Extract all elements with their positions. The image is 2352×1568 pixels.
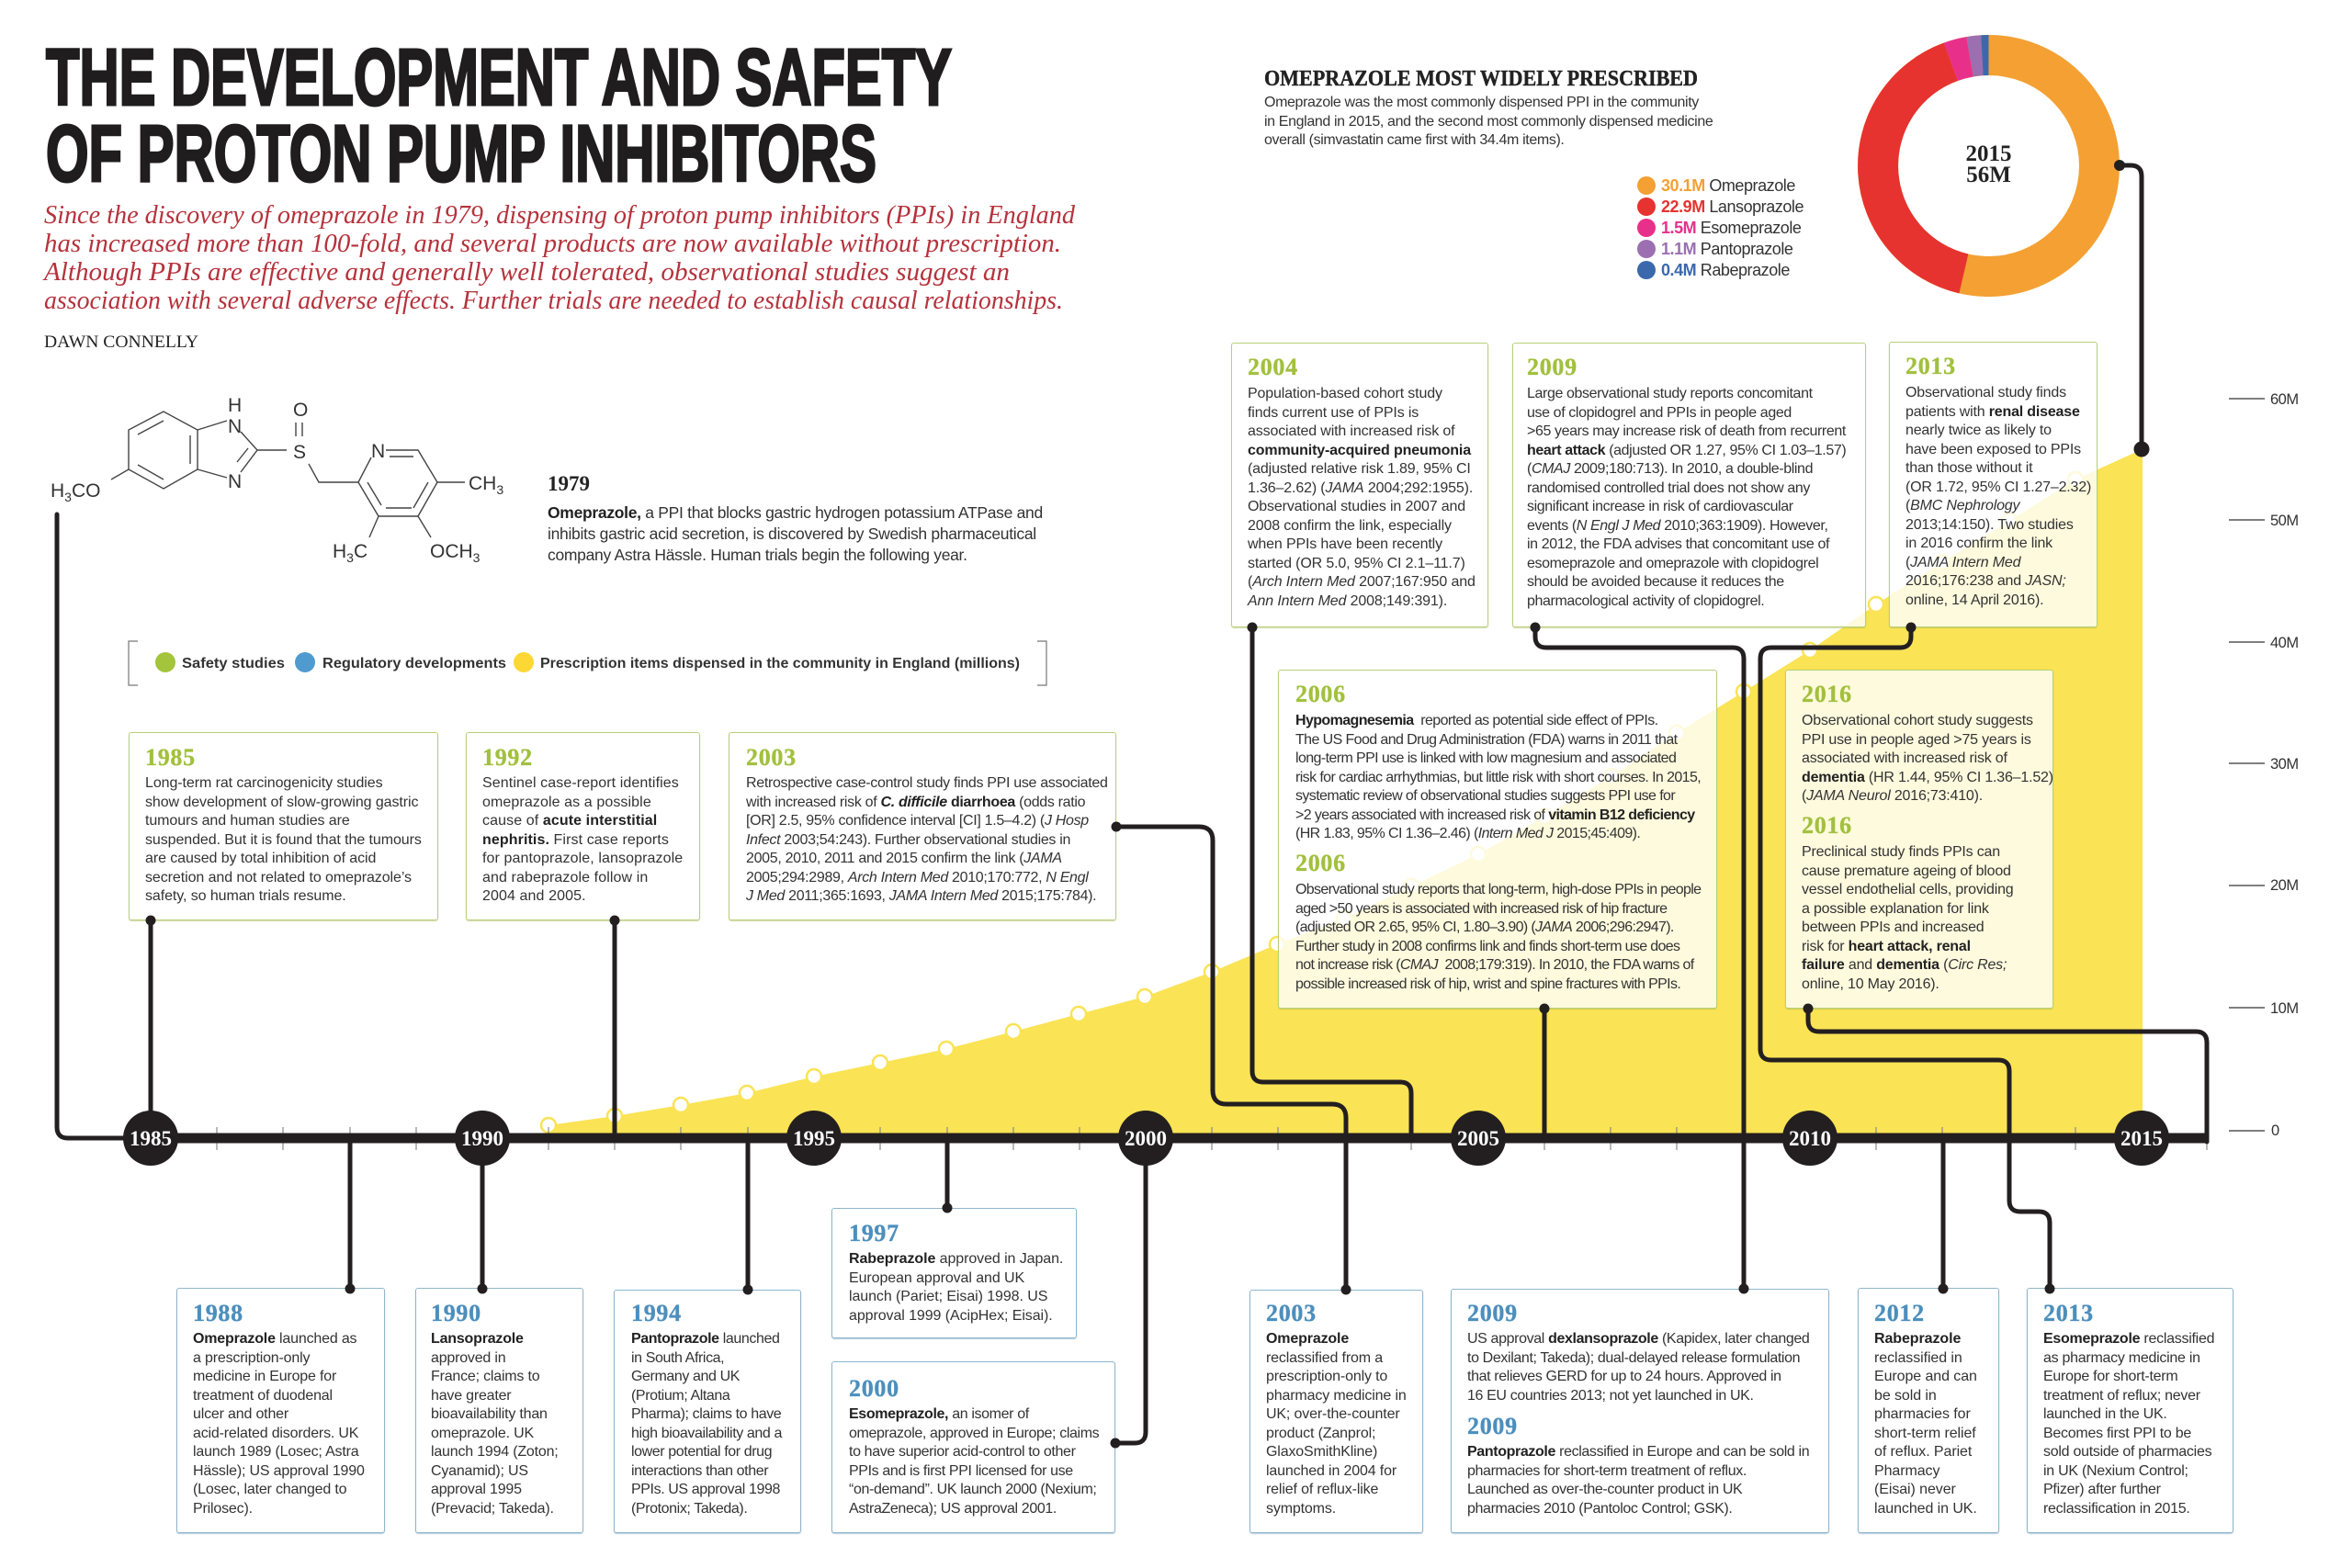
panel: regulatory 2000	[831, 1361, 1115, 1533]
legend: Regulatory developments	[322, 656, 506, 671]
icon: omeprazole molecule: N	[371, 441, 385, 462]
icon: omeprazole molecule	[51, 395, 503, 565]
body: (OR 1.72, 95% CI 1.27–2.32)	[1905, 479, 2091, 494]
legend	[129, 641, 1046, 685]
body text: inhibits gastric acid secretion, is discovered by Swedish pharmaceutical	[548, 525, 1036, 543]
panel: regulatory 1990	[415, 1288, 583, 1533]
panel: regulatory 2012	[1858, 1288, 1999, 1533]
body: pharmacies for	[1874, 1406, 1971, 1422]
body: Infect 2003;54:243). Further observational studies in	[746, 832, 1070, 847]
body: events (N Engl J Med 2010;363:1909). However,	[1527, 518, 1828, 533]
body: cause of acute interstitial	[482, 813, 657, 829]
text: omeprazole most widely prescribed: Omeprazole was the most commonly dispensed PPI in the community	[1264, 95, 1699, 110]
body: suspended. But it is found that the tumours	[145, 832, 422, 847]
body: aged >50 years is associated with increased risk of hip fracture	[1295, 900, 1667, 917]
body: launched in UK.	[1874, 1501, 1977, 1516]
body: associated with increased risk of	[1802, 750, 2007, 766]
body: as pharmacy medicine in	[2043, 1350, 2200, 1365]
body: Pharma); claims to have	[631, 1406, 781, 1422]
panel: safety 1985	[129, 732, 438, 920]
chart axis labels: 30M	[2270, 756, 2299, 773]
body: Observational study finds	[1905, 385, 2066, 400]
year: 2006	[1295, 681, 1346, 707]
chart axis labels: 40M	[2270, 635, 2299, 651]
body: a possible explanation for link	[1802, 900, 1989, 917]
body: systematic review of observational studies suggests PPI use for	[1295, 788, 1675, 804]
body: heart attack (adjusted OR 1.27, 95% CI 1.03–1.57)	[1527, 443, 1846, 457]
body: approval 1999 (AcipHex; Eisai).	[849, 1308, 1053, 1323]
title: OF PROTON PUMP INHIBITORS	[46, 109, 876, 198]
body: vessel endothelial cells, providing	[1802, 882, 2013, 897]
body: dementia (HR 1.44, 95% CI 1.36–1.52)	[1802, 770, 2053, 784]
panel: safety 2006	[1278, 670, 1717, 1009]
body: Long-term rat carcinogenicity studies	[145, 775, 382, 791]
byline: DAWN CONNELLY	[44, 333, 198, 352]
body: for pantoprazole, lansoprazole	[482, 851, 683, 866]
icon: omeprazole molecule: 3	[346, 550, 354, 565]
body: to have superior acid-control to other	[849, 1444, 1076, 1460]
body	[1467, 1444, 1809, 1516]
intro text: Although PPIs are effective and generally well tolerated, observational studies suggest an	[42, 257, 1010, 287]
text: omeprazole most widely prescribed: overall (simvastatin came first with 34.4m items).	[1264, 132, 1564, 148]
body: Hässle); US approval 1990	[193, 1462, 365, 1479]
year: 2009	[1527, 354, 1577, 380]
body: online, 10 May 2016).	[1802, 976, 1939, 992]
icon: omeprazole molecule: 3	[473, 550, 481, 565]
timeline year markers: 2005	[1457, 1127, 1499, 1150]
icon: omeprazole molecule: N	[228, 471, 242, 492]
body: 2013;14:150). Two studies	[1905, 516, 2074, 533]
donut chart: 2015 prescriptions	[1878, 55, 2099, 276]
text: omeprazole most widely prescribed: in England in 2015, and the second most commonly dispensed medicine	[1264, 114, 1713, 129]
body: Launched as over-the-counter product in UK	[1467, 1482, 1742, 1497]
body: nephritis. First case reports	[482, 832, 669, 847]
body: community-acquired pneumonia	[1248, 443, 1471, 457]
body: Pharmacy	[1874, 1462, 1939, 1479]
body: possible increased risk of hip, wrist and spine fractures with PPIs.	[1295, 976, 1680, 992]
body: randomised controlled trial does not show any	[1527, 479, 1810, 496]
body: with increased risk of C. difficile diarrhoea (odds ratio	[746, 794, 1085, 810]
icon: omeprazole molecule: 3	[64, 490, 72, 504]
body	[193, 1331, 365, 1516]
body: reclassified from a	[1266, 1350, 1383, 1365]
body: in UK (Nexium Control;	[2043, 1462, 2188, 1479]
body: Population-based cohort study	[1248, 386, 1442, 401]
icon: omeprazole molecule: OCH	[430, 541, 473, 562]
body: Observational study reports that long-term, high-dose PPIs in people	[1295, 882, 1701, 897]
chart axis labels: 20M	[2270, 877, 2299, 894]
body: interactions than other	[631, 1462, 768, 1479]
body	[1295, 882, 1702, 992]
body: have greater	[431, 1387, 511, 1404]
timeline year markers: 2010	[1789, 1127, 1831, 1150]
body: be sold in	[1874, 1387, 1937, 1404]
body	[1874, 1331, 1977, 1516]
body: have been exposed to PPIs	[1905, 441, 2081, 457]
body: J Med 2011;365:1693, JAMA Intern Med 2015;175:784).	[746, 888, 1096, 904]
body: between PPIs and increased	[1802, 919, 1984, 935]
body	[849, 1406, 1099, 1516]
body: sold outside of pharmacies	[2043, 1444, 2211, 1460]
body: Becomes first PPI to be	[2043, 1426, 2191, 1440]
body: Hypomagnesemia reported as potential side effect of PPIs.	[1295, 713, 1657, 728]
intro text	[42, 200, 1075, 315]
year heading: 1979	[548, 472, 590, 495]
title: THE DEVELOPMENT AND SAFETY	[46, 33, 952, 122]
body	[2043, 1331, 2214, 1516]
year: 2016	[1802, 812, 1852, 839]
body: launched in 2004 for	[1266, 1462, 1396, 1479]
body: not increase risk (CMAJ 2008;179:319). In 2010, the FDA warns of	[1295, 957, 1694, 973]
body: Observational cohort study suggests	[1802, 713, 2033, 728]
body: Esomeprazole reclassified	[2043, 1331, 2214, 1347]
body: lower potential for drug	[631, 1444, 772, 1460]
year: 2013	[2043, 1300, 2094, 1326]
body: “on-demand”. UK launch 2000 (Nexium;	[849, 1482, 1097, 1497]
panel: safety 2004	[1231, 343, 1488, 627]
body: in 2012, the FDA advises that concomitant use of	[1527, 536, 1829, 552]
body: Observational studies in 2007 and	[1248, 499, 1465, 514]
body: nearly twice as likely to	[1905, 423, 2052, 438]
body: 16 EU countries 2013; not yet launched in UK.	[1467, 1387, 1754, 1404]
body: Europe and can	[1874, 1369, 1977, 1384]
timeline year markers: 1990	[461, 1127, 503, 1150]
body: European approval and UK	[849, 1269, 1024, 1286]
body text	[548, 503, 1043, 564]
year: 2012	[1874, 1300, 1925, 1326]
panel: safety 1992	[466, 732, 700, 920]
body	[1802, 713, 2053, 804]
body: PPI use in people aged >75 years is	[1802, 731, 2031, 748]
legend: Prescription items dispensed in the community in England (millions)	[540, 656, 1020, 671]
body: long-term PPI use is linked with low magnesium and associated	[1295, 750, 1676, 766]
icon: omeprazole molecule: H	[228, 395, 242, 416]
icon: omeprazole molecule: 3	[496, 482, 503, 497]
timeline axis	[151, 1134, 2207, 1143]
panel: regulatory 2013	[2027, 1288, 2233, 1533]
year: 2003	[746, 744, 797, 771]
body: symptoms.	[1266, 1501, 1336, 1516]
body: 2005, 2010, 2011 and 2015 confirm the link (JAMA	[746, 851, 1062, 866]
body: Europe for short-term	[2043, 1369, 2177, 1384]
body: Omeprazole launched as	[193, 1331, 356, 1347]
body	[482, 775, 683, 904]
donut legend: 1.5M Esomeprazole	[1661, 219, 1802, 237]
body: are caused by total inhibition of acid	[145, 851, 376, 866]
body: Rabeprazole approved in Japan.	[849, 1251, 1063, 1267]
body: risk for cardiac arrhythmias, but little risk with short courses. In 2015,	[1295, 770, 1701, 784]
donut legend	[1637, 176, 1804, 279]
body	[1266, 1331, 1407, 1516]
body: (JAMA Intern Med	[1905, 555, 2020, 570]
text: omeprazole most widely prescribed	[1264, 95, 1713, 148]
donut chart: 2015 prescriptions: 56M	[1966, 163, 2011, 187]
body: launched in the UK.	[2043, 1406, 2167, 1422]
icon: omeprazole molecule: S	[293, 442, 306, 463]
body	[1527, 386, 1847, 608]
timeline year markers: 2015	[2120, 1127, 2163, 1150]
year: 1988	[193, 1300, 243, 1326]
intro text: association with several adverse effects. Further trials are needed to establish causal relationships.	[44, 286, 1063, 315]
body: use of clopidogrel and PPIs in people aged	[1527, 404, 1792, 421]
donut legend: 22.9M Lansoprazole	[1661, 197, 1804, 216]
connector arrows	[57, 165, 2207, 1443]
chart axis labels	[2229, 391, 2299, 1139]
body: pharmacies 2010 (Pantoloc Control; GSK).	[1467, 1501, 1732, 1516]
timeline year markers: 2000	[1125, 1127, 1167, 1150]
body	[431, 1331, 559, 1516]
icon: omeprazole molecule: CH	[469, 473, 496, 494]
chart axis labels: 60M	[2270, 391, 2299, 408]
panel: safety 2016	[1785, 670, 2053, 1009]
body: tumours and human studies are	[145, 813, 350, 829]
year: 1985	[145, 744, 196, 771]
body: Rabeprazole	[1874, 1331, 1961, 1347]
body: Sentinel case-report identifies	[482, 775, 679, 791]
panel: regulatory 1994	[614, 1290, 801, 1533]
year: 2009	[1467, 1413, 1518, 1439]
panel: safety 2013	[1889, 342, 2098, 627]
body: 2008 confirm the link, especially	[1248, 518, 1452, 533]
body: (HR 1.83, 95% CI 1.36–2.46) (Intern Med J 2015;45:409).	[1295, 826, 1640, 841]
body	[631, 1331, 783, 1516]
body: Pfizer) after further	[2043, 1482, 2161, 1497]
year: 1994	[631, 1300, 682, 1326]
body: that relieves GERD for up to 24 hours. Approved in	[1467, 1369, 1781, 1384]
body: acid-related disorders. UK	[193, 1426, 358, 1440]
donut legend: 1.1M Pantoprazole	[1661, 240, 1793, 258]
year: 2003	[1266, 1300, 1317, 1326]
body: approval 1995	[431, 1482, 522, 1497]
intro text: has increased more than 100-fold, and several products are now available without prescription.	[44, 229, 1061, 258]
body: Prilosec).	[193, 1501, 253, 1516]
body: omeprazole. UK	[431, 1426, 534, 1440]
body text: company Astra Hässle. Human trials begin the following year.	[548, 546, 967, 564]
body: show development of slow-growing gastric	[145, 794, 418, 810]
timeline year markers: 1985	[130, 1127, 172, 1150]
body: 2016;176:238 and JASN;	[1905, 573, 2066, 589]
body: (JAMA Neurol 2016;73:410).	[1802, 788, 1983, 804]
body: to Dexilant; Takeda); dual-delayed release formulation	[1467, 1350, 1800, 1365]
body: (Protium; Altana	[631, 1387, 729, 1404]
timeline year markers	[123, 1111, 2169, 1166]
body: (Protonix; Takeda).	[631, 1501, 747, 1516]
body: significant increase in risk of cardiovascular	[1527, 499, 1793, 514]
body: and rabeprazole follow in	[482, 869, 648, 886]
body: product (Zanprol;	[1266, 1426, 1375, 1440]
body: medicine in Europe for	[193, 1369, 336, 1384]
body text: Omeprazole, a PPI that blocks gastric hydrogen potassium ATPase and	[548, 503, 1043, 522]
body: (adjusted relative risk 1.89, 95% CI	[1248, 461, 1471, 477]
body: Large observational study reports concomitant	[1527, 386, 1813, 401]
body: in 2016 confirm the link	[1905, 536, 2052, 551]
year: 2006	[1295, 850, 1346, 876]
year: 2009	[1467, 1300, 1518, 1326]
body: should be avoided because it reduces the	[1527, 574, 1784, 590]
body	[1467, 1331, 1809, 1404]
panel: safety 2003	[729, 732, 1116, 920]
body	[1295, 713, 1701, 841]
donut legend: 0.4M Rabeprazole	[1661, 261, 1790, 279]
timeline year markers: 1995	[793, 1127, 835, 1150]
body: US approval dexlansoprazole (Kapidex, later changed	[1467, 1331, 1809, 1347]
title	[46, 33, 952, 198]
body: associated with increased risk of	[1248, 423, 1454, 439]
body	[1247, 386, 1476, 608]
year: 2013	[1905, 353, 1956, 379]
body: treatment of reflux; never	[2043, 1387, 2200, 1404]
body: France; claims to	[431, 1369, 539, 1384]
body: (Arch Intern Med 2007;167:950 and	[1248, 574, 1476, 590]
body: launch 1989 (Losec; Astra	[193, 1444, 359, 1460]
body: (CMAJ 2009;180:713). In 2010, a double-blind	[1527, 461, 1813, 477]
body: cause premature ageing of blood	[1802, 863, 2011, 878]
body: than those without it	[1905, 460, 2032, 476]
body	[849, 1251, 1063, 1323]
body: pharmacological activity of clopidogrel.	[1527, 593, 1764, 608]
body: bioavailability than	[431, 1406, 548, 1422]
body: approved in	[431, 1350, 505, 1365]
year: 2004	[1248, 354, 1298, 380]
body: in South Africa,	[631, 1350, 724, 1365]
body: failure and dementia (Circ Res;	[1802, 957, 2007, 973]
body: Germany and UK	[631, 1369, 740, 1384]
body: secretion and not related to omeprazole’s	[145, 869, 412, 886]
chart axis labels: 50M	[2270, 513, 2299, 529]
body: patients with renal disease	[1905, 404, 2080, 419]
body	[746, 775, 1108, 904]
body: esomeprazole and omeprazole with clopidogrel	[1527, 555, 1818, 571]
intro text: Since the discovery of omeprazole in 1979, dispensing of proton pump inhibitors (PPIs) in England	[44, 200, 1075, 230]
donut chart: 2015 prescriptions: 2015	[1966, 141, 2012, 166]
icon: omeprazole molecule: H	[333, 541, 346, 562]
body: GlaxoSmithKline)	[1266, 1444, 1377, 1460]
body: PPIs. US approval 1998	[631, 1482, 780, 1497]
donut legend: 30.1M Omeprazole	[1661, 176, 1795, 195]
body	[145, 775, 422, 904]
body: 2004 and 2005.	[482, 888, 586, 904]
body: 2005;294:2989, Arch Intern Med 2010;170:772, N Engl	[746, 869, 1088, 886]
year: 2016	[1802, 681, 1852, 707]
body: omeprazole as a possible	[482, 794, 651, 810]
chart axis labels: 10M	[2270, 1000, 2299, 1017]
body: Lansoprazole	[431, 1331, 524, 1347]
body	[1905, 385, 2091, 608]
body: Pantoprazole reclassified in Europe and can be sold in	[1467, 1444, 1809, 1460]
body: omeprazole, approved in Europe; claims	[849, 1426, 1099, 1440]
body: [OR] 2.5, 95% confidence interval [CI] 1.5–4.2) (J Hosp	[746, 813, 1089, 829]
body: launch 1994 (Zoton;	[431, 1444, 559, 1460]
year: 1990	[431, 1300, 481, 1326]
body: Preclinical study finds PPIs can	[1802, 844, 2000, 860]
body: (Eisai) never	[1874, 1482, 1956, 1497]
body: prescription-only to	[1266, 1369, 1387, 1384]
panel: regulatory 1997	[831, 1208, 1077, 1338]
body: ulcer and other	[193, 1406, 288, 1422]
body: when PPIs have been recently	[1248, 536, 1442, 552]
body: started (OR 5.0, 95% CI 2.1–11.7)	[1248, 555, 1465, 571]
body: (Losec, later changed to	[193, 1482, 346, 1497]
body: reclassified in	[1874, 1350, 1962, 1365]
legend: Safety studies	[182, 656, 285, 671]
icon: omeprazole molecule: N	[228, 416, 242, 437]
body: UK; over-the-counter	[1266, 1406, 1400, 1422]
heading: omeprazole most widely prescribed: OMEPRAZOLE MOST WIDELY PRESCRIBED	[1264, 67, 1698, 91]
year: 1992	[482, 744, 533, 771]
body: reclassification in 2015.	[2043, 1501, 2190, 1516]
panel: regulatory 2003	[1250, 1290, 1423, 1533]
connector end dots	[145, 160, 2150, 1448]
body: Omeprazole	[1266, 1331, 1349, 1347]
body: >65 years may increase risk of death from recurrent	[1527, 423, 1846, 439]
body: online, 14 April 2016).	[1905, 592, 2043, 608]
panel: regulatory 1988	[176, 1288, 385, 1533]
body: Pantoprazole launched	[631, 1331, 779, 1347]
icon: omeprazole molecule: H	[51, 480, 64, 502]
body: Esomeprazole, an isomer of	[849, 1406, 1029, 1422]
timeline ticks	[217, 1127, 2207, 1150]
body: Ann Intern Med 2008;149:391).	[1248, 593, 1447, 608]
body: pharmacy medicine in	[1266, 1387, 1407, 1404]
body: treatment of duodenal	[193, 1387, 333, 1404]
year: 2000	[849, 1375, 899, 1402]
chart axis labels: 0	[2271, 1122, 2279, 1139]
body: high bioavailability and a	[631, 1426, 782, 1440]
panel: safety 2009	[1512, 343, 1866, 627]
body: launch (Pariet; Eisai) 1998. US	[849, 1289, 1047, 1304]
body: finds current use of PPIs is	[1248, 404, 1419, 421]
body: AstraZeneca); US approval 2001.	[849, 1501, 1057, 1516]
body: >2 years associated with increased risk of vitamin B12 deficiency	[1295, 807, 1695, 823]
body: Cyanamid); US	[431, 1462, 528, 1479]
body: 1.36–2.62) (JAMA 2004;292:1955).	[1248, 479, 1473, 496]
body: short-term relief	[1874, 1426, 1976, 1440]
icon: omeprazole molecule: O	[293, 400, 308, 421]
body: Further study in 2008 confirms link and finds short-term use does	[1295, 939, 1679, 953]
body: (Prevacid; Takeda).	[431, 1501, 554, 1516]
year: 1997	[849, 1220, 899, 1247]
panel: regulatory 2009	[1451, 1289, 1829, 1533]
body: (BMC Nephrology	[1905, 498, 2019, 513]
body: relief of reflux-like	[1266, 1482, 1378, 1497]
body: Retrospective case-control study finds PPI use associated	[746, 775, 1108, 791]
body: of reflux. Pariet	[1874, 1444, 1972, 1460]
body: pharmacies for short-term treatment of reflux.	[1467, 1462, 1747, 1479]
body: PPIs and is first PPI licensed for use	[849, 1462, 1073, 1479]
body: risk for heart attack, renal	[1802, 939, 1971, 953]
body	[1802, 844, 2013, 992]
icon: omeprazole molecule: CO	[72, 480, 100, 502]
area chart: prescription items dispensed	[541, 449, 2143, 1138]
body: safety, so human trials resume.	[145, 888, 346, 904]
body: a prescription-only	[193, 1350, 310, 1365]
text: 1979 discovery	[548, 472, 1043, 564]
body: (adjusted OR 2.65, 95% CI, 1.80–3.90) (JAMA 2006;296:2947).	[1295, 919, 1674, 935]
icon: omeprazole molecule: C	[354, 541, 368, 562]
body: The US Food and Drug Administration (FDA) warns in 2011 that	[1295, 731, 1677, 748]
